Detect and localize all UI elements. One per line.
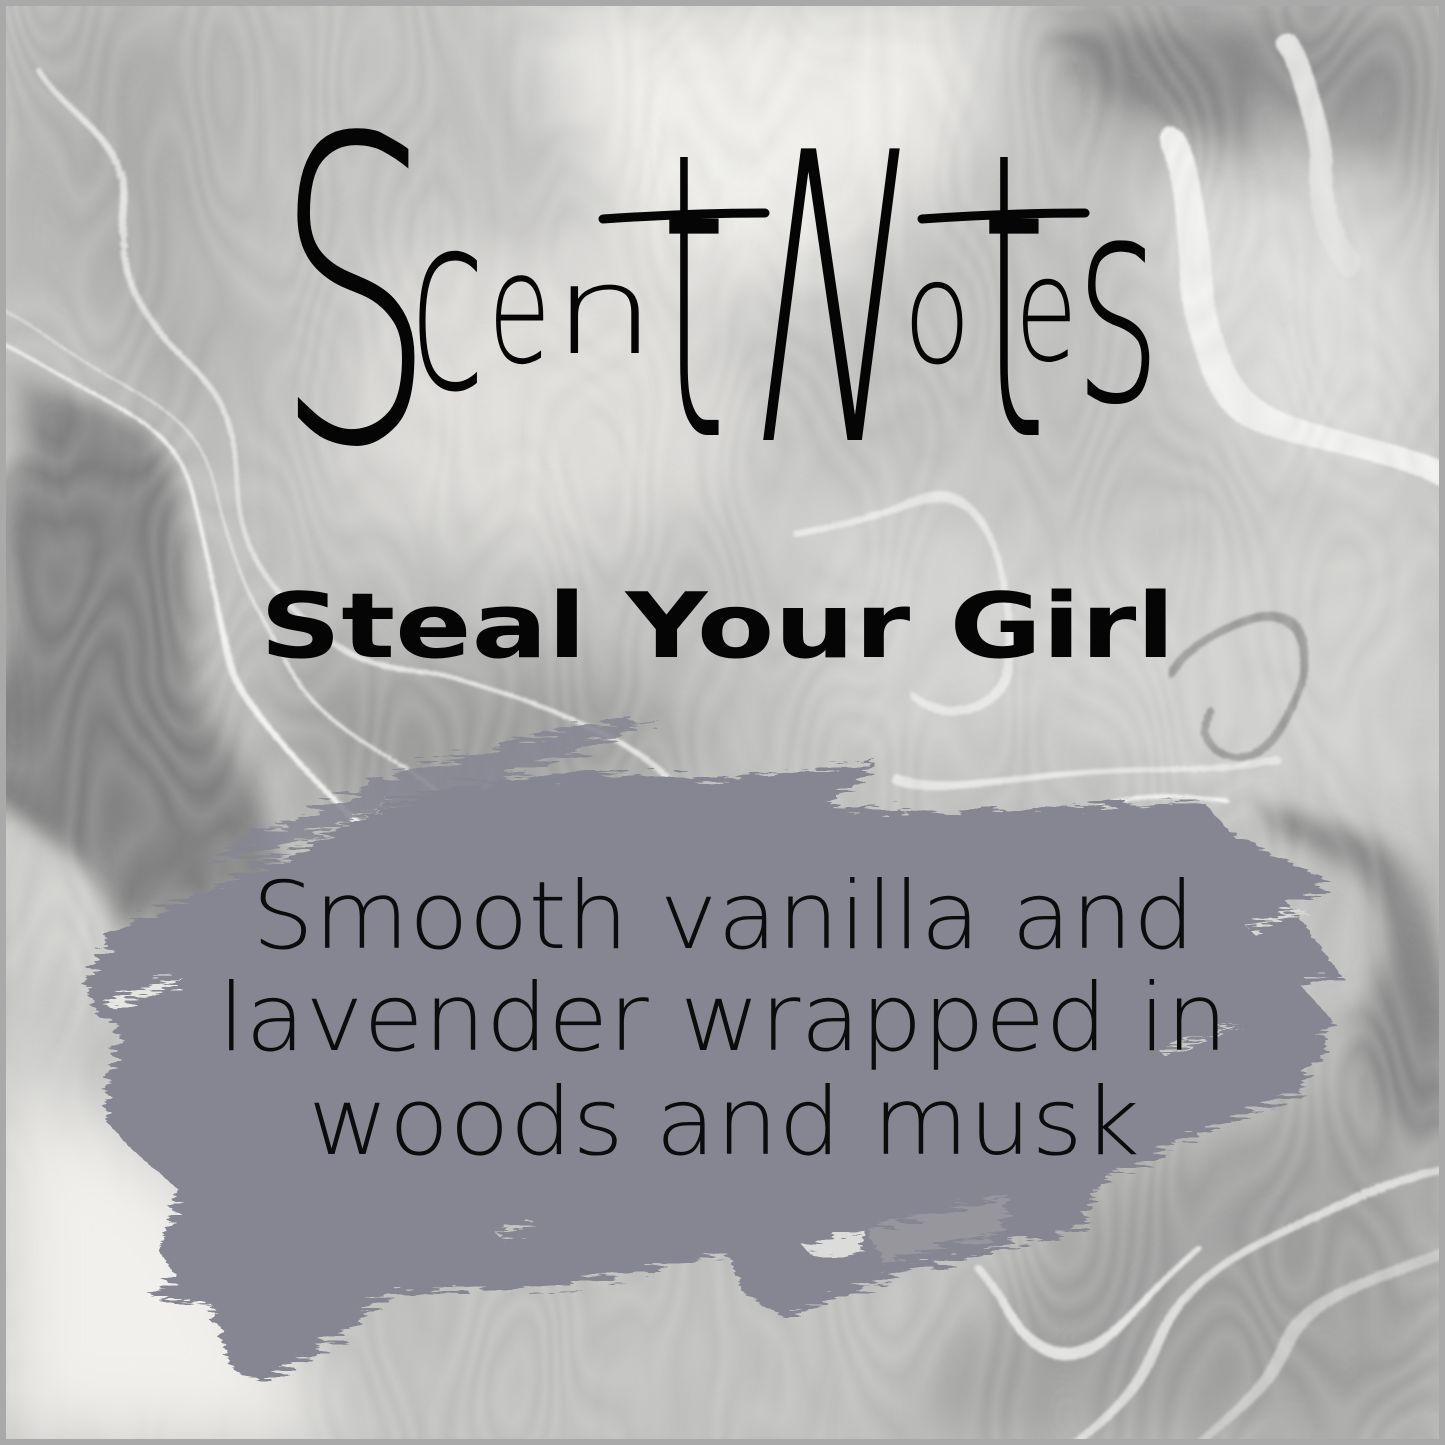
description text: Smooth vanilla and [252, 862, 1195, 971]
title: Scent Notes: N [726, 69, 942, 535]
title: Scent Notes: e [1015, 226, 1077, 395]
description text [218, 862, 1228, 1177]
heading: Steal Your Girl: Steal Your Girl [260, 574, 1175, 679]
title: Scent Notes: s [1075, 136, 1161, 467]
title: Scent Notes: c [410, 161, 485, 446]
title: Scent Notes: t [661, 67, 726, 529]
title: Scent Notes [275, 51, 1161, 539]
title: Scent Notes: t [981, 67, 1046, 529]
brush stroke panel [86, 718, 1342, 1383]
description text: woods and musk [308, 1068, 1140, 1177]
title: Scent Notes: n [552, 240, 656, 382]
title: Scent Notes: o [903, 230, 971, 397]
title: Scent Notes: S [275, 51, 435, 539]
description text: lavender wrapped in [218, 964, 1228, 1073]
title: Scent Notes: e [488, 218, 551, 399]
